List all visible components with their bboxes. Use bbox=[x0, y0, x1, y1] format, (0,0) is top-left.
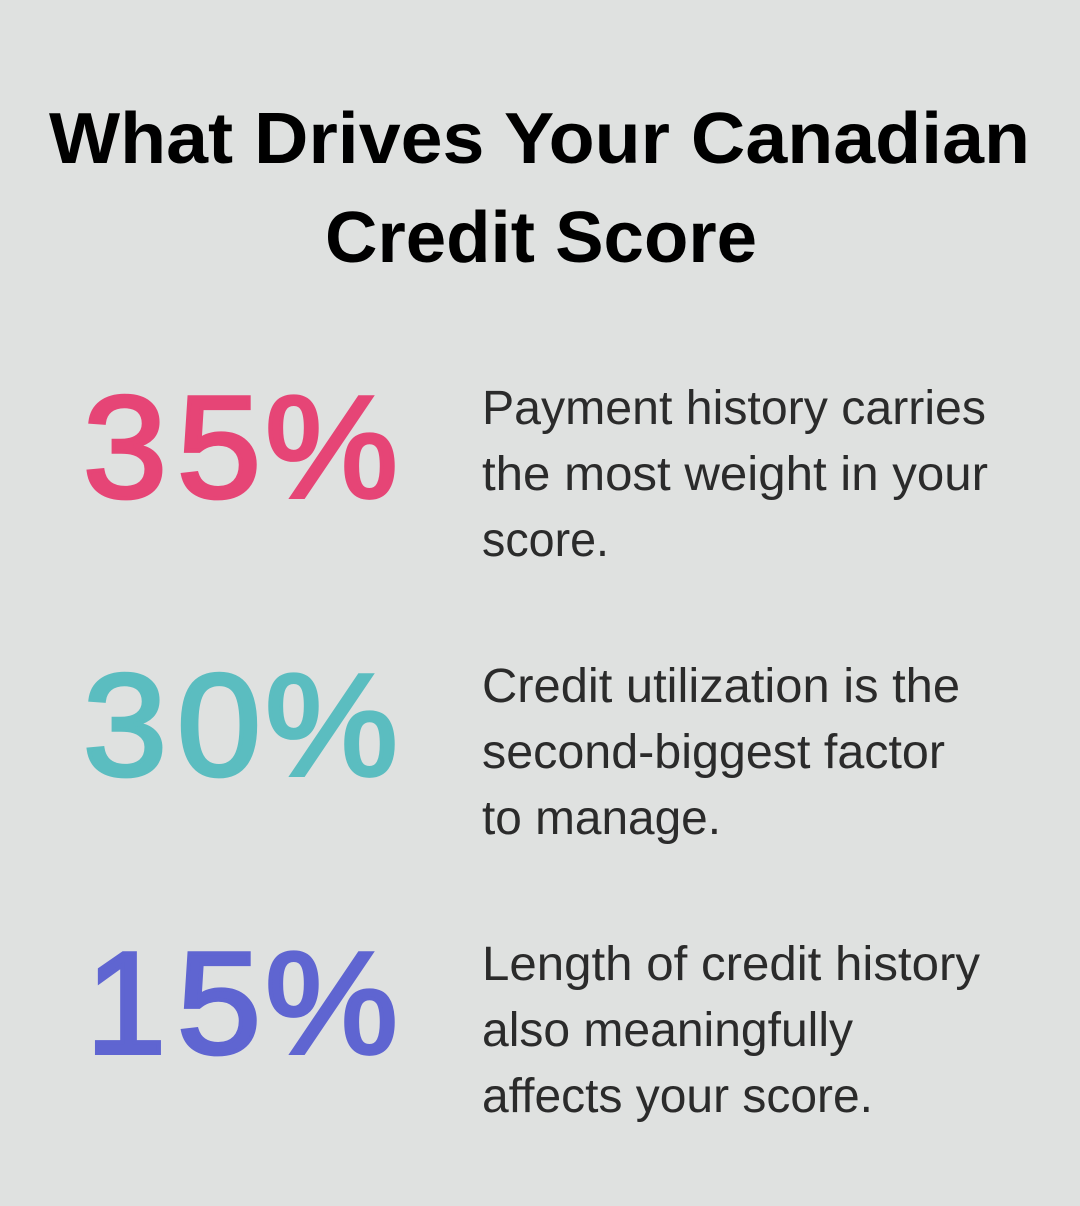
description: length of credit history bbox=[482, 938, 980, 1123]
description: credit utilization bbox=[482, 660, 960, 845]
description: payment history: Payment history carries bbox=[482, 382, 986, 435]
stat value: 35%: 5 bbox=[177, 366, 261, 528]
description: length of credit history: Length of credit history bbox=[482, 938, 980, 991]
stat value: 35%: 3 bbox=[83, 366, 167, 528]
title: What Drives Your Canadian bbox=[49, 99, 1030, 179]
description: credit utilization: Credit utilization is the bbox=[482, 660, 960, 713]
stat row: payment history bbox=[83, 366, 988, 567]
description: credit utilization: second-biggest factor bbox=[482, 726, 945, 779]
title bbox=[49, 99, 1030, 278]
stat value: 30%: % bbox=[265, 644, 398, 806]
stat value: 15%: 1 bbox=[86, 922, 166, 1084]
description: payment history: score. bbox=[482, 514, 609, 567]
title: Credit Score bbox=[325, 198, 757, 278]
stat value: 15%: 5 bbox=[177, 922, 261, 1084]
description: credit utilization: to manage. bbox=[482, 792, 721, 845]
stat value: 15%: % bbox=[265, 922, 398, 1084]
stat value: 30%: 3 bbox=[83, 644, 167, 806]
stat value: 15% bbox=[86, 922, 398, 1084]
description: length of credit history: also meaningfully bbox=[482, 1004, 853, 1057]
stat value: 35% bbox=[83, 366, 398, 528]
description: payment history: the most weight in your bbox=[482, 448, 988, 501]
stat value: 30%: 0 bbox=[177, 644, 261, 806]
stat value: 35%: % bbox=[265, 366, 398, 528]
description: length of credit history: affects your score. bbox=[482, 1070, 873, 1123]
stat row: credit utilization bbox=[83, 644, 960, 845]
stat row: length of credit history bbox=[86, 922, 980, 1123]
stat value: 30% bbox=[83, 644, 398, 806]
description: payment history bbox=[482, 382, 988, 567]
